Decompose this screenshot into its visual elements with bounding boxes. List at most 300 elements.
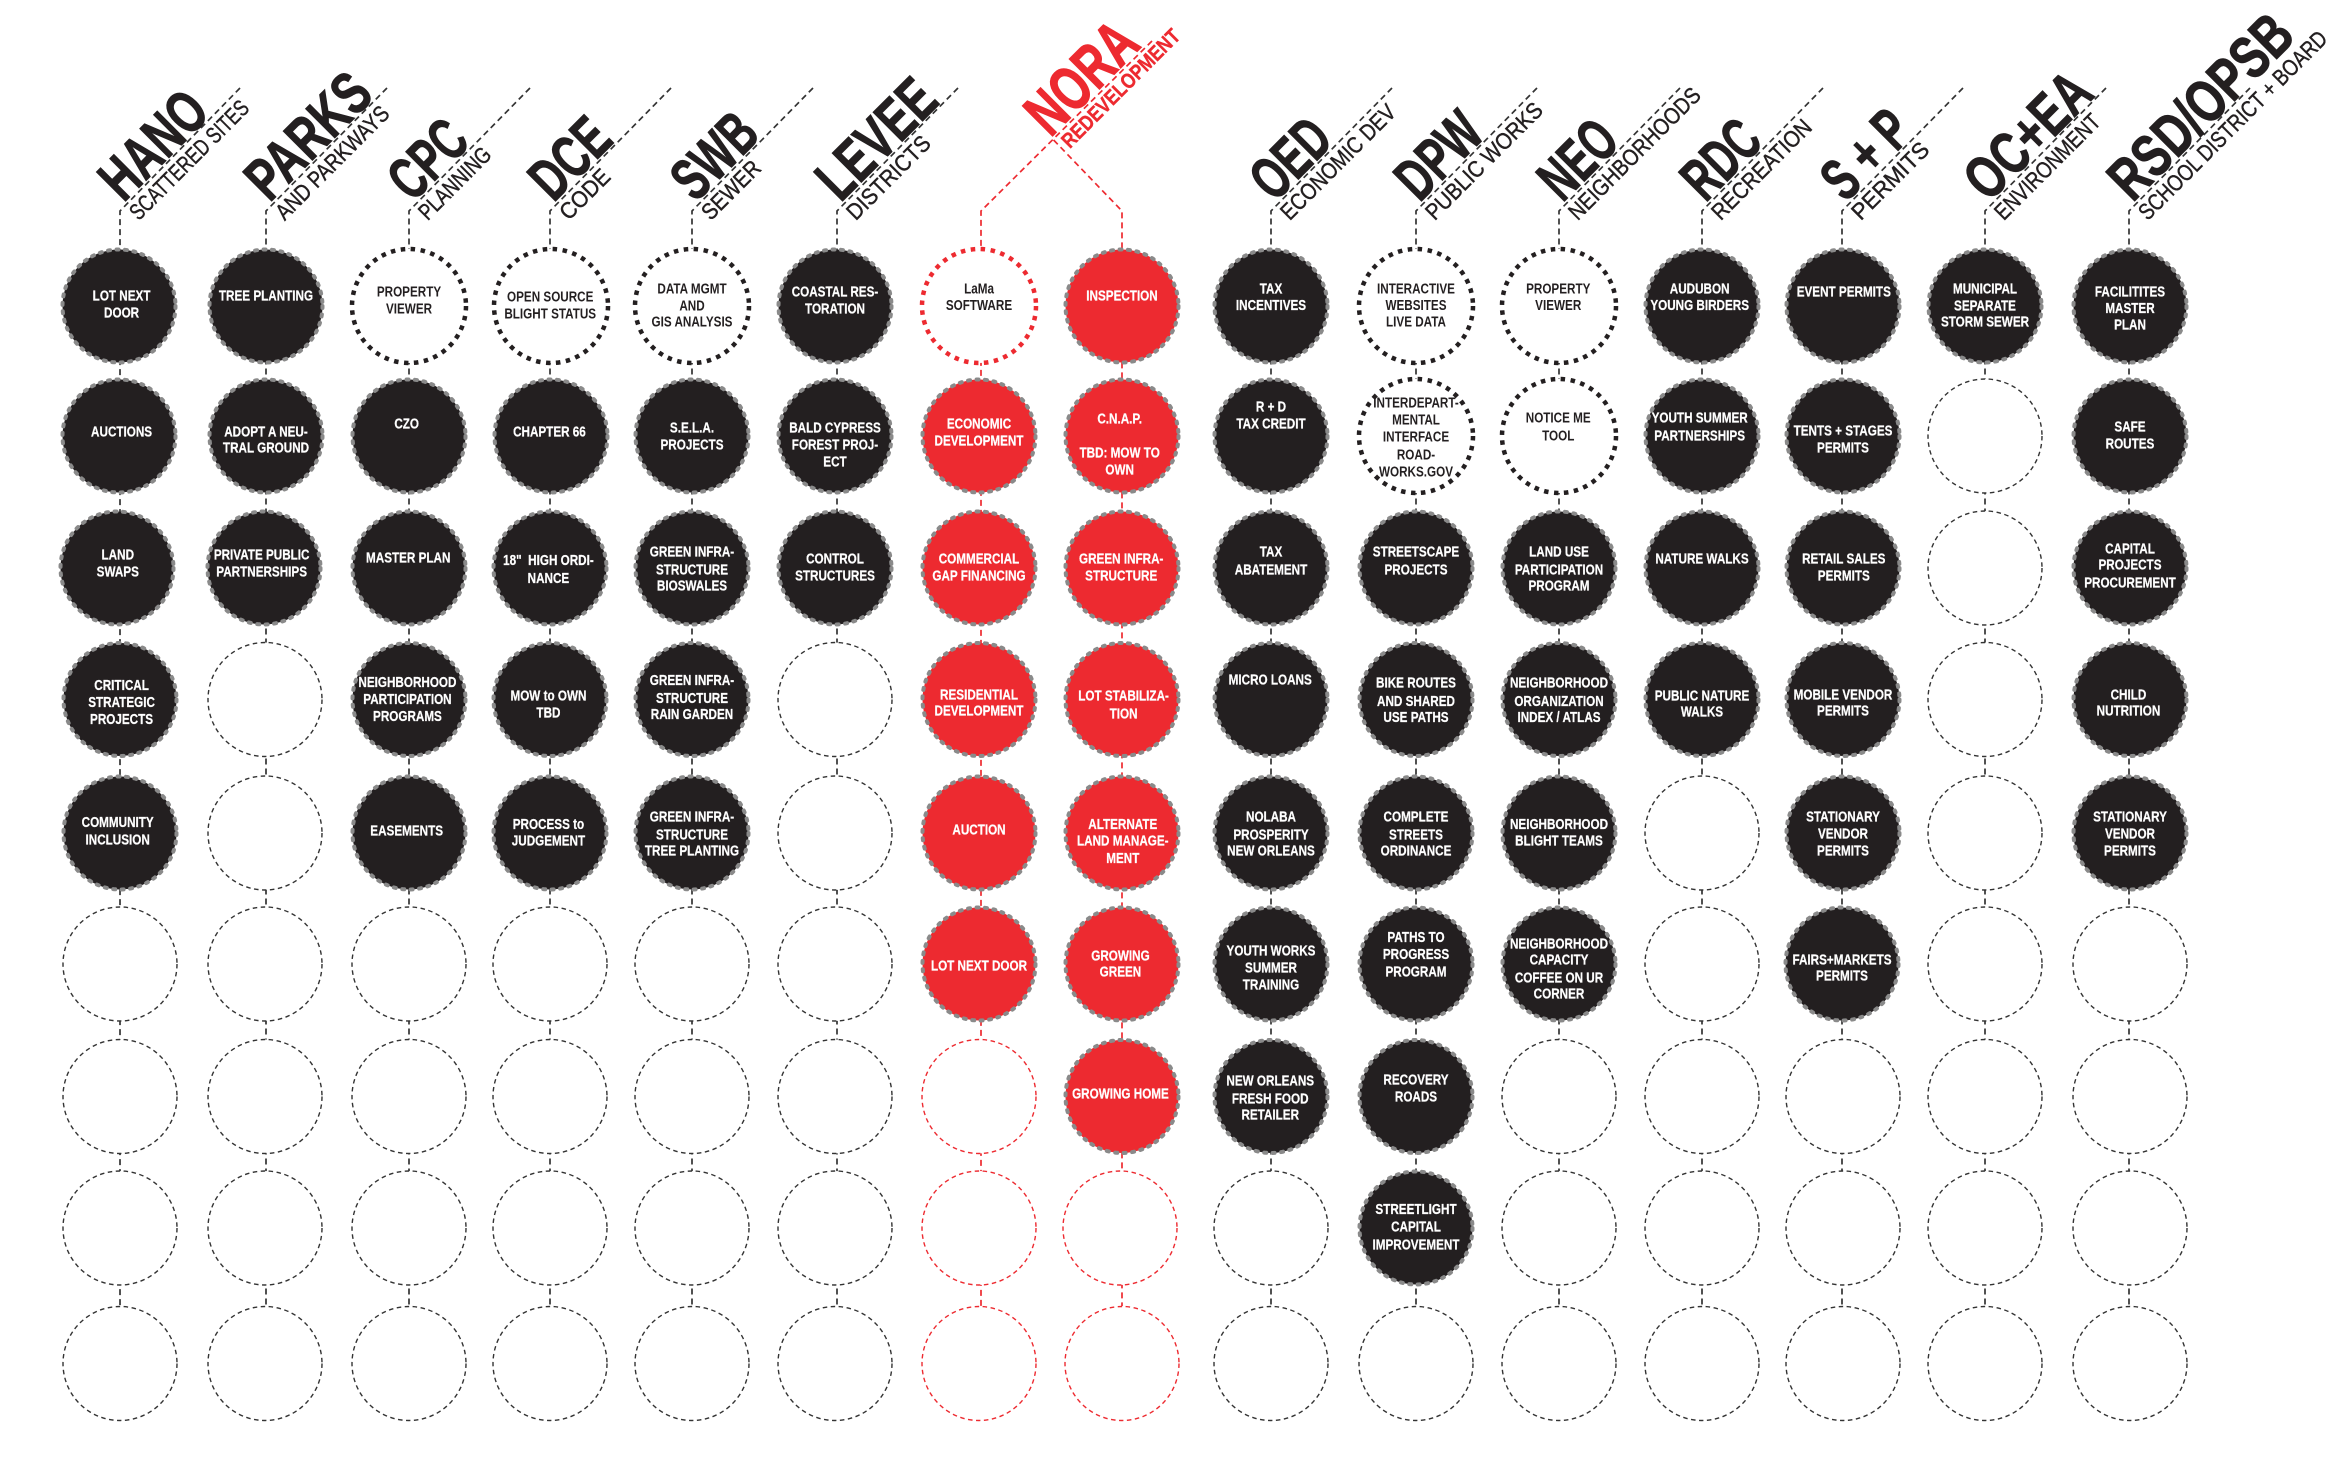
connector line <box>266 88 387 1306</box>
circle: easements: EASEMENTS <box>370 822 443 839</box>
circle: property viewer: VIEWER <box>386 300 432 317</box>
circle: neighborhood blight teams <box>1502 776 1616 890</box>
column: OED <box>1214 59 1401 1420</box>
circle: facilitites master plan: PLAN <box>2114 316 2146 333</box>
circle: event permits <box>1786 250 1900 362</box>
circle: growing green: GREEN <box>1100 963 1141 980</box>
circle: MOW to own TBD: MOW to OWN <box>510 687 586 704</box>
connector line <box>409 88 530 1306</box>
circle: property viewer <box>352 249 466 363</box>
heading: NEO neighborhoods <box>1523 42 1706 225</box>
circle: LaMa software <box>922 249 1036 363</box>
circle: facilitites master plan: MASTER <box>2105 300 2155 316</box>
circle: youth summer partnerships: PARTNERSHIPS <box>1654 427 1745 444</box>
heading: NEO neighborhoods: NEO <box>1524 106 1631 212</box>
circle: property viewer: PROPERTY <box>1526 280 1590 297</box>
circle: tax abatement: ABATEMENT <box>1235 561 1308 578</box>
circle: R + D tax credit <box>1214 380 1328 492</box>
circle: alternate land management: ALTERNATE <box>1088 816 1157 832</box>
heading: DCE code <box>514 104 635 225</box>
circle: streetlight capital improvement: STREETLIGHT <box>1375 1201 1457 1217</box>
empty circles <box>63 907 177 1420</box>
circle: interdepartmental interface roadworks.gov: MENTAL <box>1392 411 1440 428</box>
circle: bald cypress forest project: BALD CYPRESS <box>789 419 881 436</box>
circle: process to judgement: JUDGEMENT <box>512 832 586 849</box>
circle: neighborhood participation programs: PROGRAMS <box>373 708 442 724</box>
circle: bald cypress forest project: FOREST PROJ- <box>792 436 878 453</box>
circle: critical strategic projects <box>64 643 176 756</box>
circle: Audubon young birders: AUDUBON <box>1670 280 1730 297</box>
circle: youth summer partnerships: YOUTH SUMMER <box>1652 409 1748 426</box>
circle: critical strategic projects: PROJECTS <box>90 711 153 727</box>
circle: green infrastructure bioswales <box>636 512 748 624</box>
circle: green infrastructure bioswales: BIOSWALES <box>657 577 727 594</box>
heading: OC+EA environment <box>1949 58 2116 225</box>
circle: inspection <box>1066 250 1178 362</box>
circle: neighborhood participation programs: NEIGHBORHOOD <box>358 674 457 690</box>
circle: land swaps: SWAPS <box>97 563 139 580</box>
circle: green infrastructure tree planting: STRUCTURE <box>656 826 728 843</box>
circle: complete streets ordinance: COMPLETE <box>1384 808 1448 825</box>
circle: growing green: GROWING <box>1091 947 1150 964</box>
circle: fairs + markets permits: FAIRS+MARKETS <box>1792 951 1892 968</box>
circle: lot next door: LOT NEXT DOOR <box>931 957 1027 974</box>
column group: NORA <box>922 0 1185 1421</box>
circle: mobile vendor permits <box>1786 643 1900 756</box>
circle: process to judgement: PROCESS to <box>513 816 584 832</box>
circle: fairs + markets permits <box>1786 908 1898 1020</box>
circle: private public partnerships: PARTNERSHIPS <box>216 563 307 580</box>
circle: neighborhood organization index / atlas: NEIGHBORHOOD <box>1510 674 1608 691</box>
circle: neighborhood capacity coffee on ur corner: CORNER <box>1534 985 1585 1002</box>
circle: facilitites master plan <box>2074 250 2186 362</box>
circle: lot next door <box>922 908 1036 1020</box>
circle: New Orleans fresh food retailer <box>1214 1040 1328 1153</box>
circle: interactive websites live data: INTERACTIVE <box>1377 280 1455 297</box>
circle: green infrastructure tree planting: TREE PLANTING <box>645 842 739 859</box>
circle: tax abatement: TAX <box>1260 543 1282 560</box>
heading: DPW public works: PUBLIC WORKS <box>1420 97 1548 225</box>
circle: data mgmt and GIS analysis: GIS ANALYSIS <box>652 313 733 330</box>
circle: neighborhood capacity coffee on ur corner: NEIGHBORHOOD <box>1510 935 1608 952</box>
empty circles <box>778 642 892 1420</box>
circle: green infrastructure: GREEN INFRA- <box>1079 550 1163 567</box>
circle: child nutrition: NUTRITION <box>2097 702 2160 719</box>
empty circles <box>493 907 607 1420</box>
circle: tents + stages permits: PERMITS <box>1817 439 1869 456</box>
connector line <box>1702 88 1823 1306</box>
circle: control structures: CONTROL <box>806 550 864 567</box>
connector line <box>1559 88 1680 1306</box>
circle: master plan: MASTER PLAN <box>366 549 450 566</box>
circle: bald cypress forest project: ECT <box>823 453 847 470</box>
circle: capital projects procurement: PROJECTS <box>2098 556 2162 573</box>
empty circles <box>1786 1040 1900 1420</box>
connector line <box>692 88 813 1306</box>
circle: open source blight status: BLIGHT STATUS <box>504 305 596 322</box>
circle: neighborhood blight teams: BLIGHT TEAMS <box>1515 832 1603 849</box>
circle: municipal separate storm sewer: STORM SEWER <box>1941 313 2029 330</box>
circle: control structures: STRUCTURES <box>795 567 875 584</box>
circle: nature walks: NATURE WALKS <box>1655 550 1749 567</box>
circle: complete streets ordinance: ORDINANCE <box>1381 842 1451 859</box>
circle: public nature walks <box>1646 643 1758 756</box>
circle: lot stabilization: LOT STABILIZA- <box>1078 687 1169 704</box>
connector line <box>1985 88 2106 1306</box>
circle: interdepartmental interface roadworks.gov: ROAD- <box>1397 446 1435 463</box>
circle: youth works summer training: SUMMER <box>1245 959 1297 976</box>
circle: public nature walks: WALKS <box>1681 703 1723 720</box>
heading: HANO scattered sites: SCATTERED SITES <box>124 95 254 225</box>
circle: recovery roads <box>1360 1040 1472 1153</box>
circle: tree planting <box>210 250 322 362</box>
circle: capital projects procurement: CAPITAL <box>2105 540 2155 557</box>
empty red circles <box>1063 1171 1179 1420</box>
column: NEO <box>1502 42 1706 1421</box>
circle: green infrastructure rain garden: GREEN INFRA- <box>650 672 734 688</box>
heading: DCE code: DCE <box>515 104 624 212</box>
circle: capital projects procurement <box>2074 512 2186 624</box>
circle: C.N.A.P.: C.N.A.P. <box>1097 410 1142 427</box>
circle: open source blight status <box>494 249 608 363</box>
circle: coastal restoration: TORATION <box>805 300 865 317</box>
circle: municipal separate storm sewer: SEPARATE <box>1954 297 2016 314</box>
circle: New Orleans fresh food retailer: FRESH FOOD <box>1232 1090 1309 1107</box>
column: SWB <box>635 88 813 1420</box>
heading: OC+EA environment: ENVIRONMENT <box>1989 108 2106 225</box>
circle: inspection: INSPECTION <box>1086 287 1158 304</box>
circle: bald cypress forest project <box>778 380 892 492</box>
circle: private public partnerships <box>208 512 320 624</box>
circle: lot stabilization: TION <box>1110 705 1138 722</box>
empty circles <box>1502 1040 1616 1420</box>
circle: neighborhood capacity coffee on ur corner <box>1502 908 1616 1020</box>
circle: paths to progress program: PROGRAM <box>1385 963 1447 980</box>
heading: SWB sewer: SEWER <box>696 155 766 225</box>
circle: neighborhood blight teams: NEIGHBORHOOD <box>1510 816 1608 832</box>
circle: streetlight capital improvement <box>1360 1172 1472 1284</box>
circle: tax incentives: TAX <box>1260 280 1282 297</box>
circle: lot next door: LOT NEXT <box>93 287 151 304</box>
circle: bike routes and shared use paths: AND SHARED <box>1377 693 1455 709</box>
circle: mobile vendor permits: MOBILE VENDOR <box>1794 686 1893 703</box>
circle: streetlight capital improvement: CAPITAL <box>1391 1218 1441 1235</box>
circle: neighborhood organization index / atlas: ORGANIZATION <box>1514 693 1604 709</box>
column: DCE <box>493 88 671 1420</box>
circle: youth works summer training <box>1214 908 1328 1020</box>
circle: critical strategic projects: CRITICAL <box>94 677 149 693</box>
circle: chapter 66 <box>494 380 608 492</box>
circle: neighborhood participation programs <box>352 643 466 756</box>
circle: neighborhood organization index / atlas: INDEX / ATLAS <box>1517 709 1601 725</box>
connector line <box>1842 88 1963 1306</box>
circle: 18 inch high ordinance: NANCE <box>528 570 569 586</box>
circle: MOW to own TBD: TBD <box>536 704 561 721</box>
column: HANO <box>60 55 254 1421</box>
circle: tax incentives <box>1214 250 1328 362</box>
circle: complete streets ordinance <box>1360 776 1472 890</box>
heading: S + P permits: PERMITS <box>1846 136 1934 225</box>
circle: paths to progress program: PROGRESS <box>1383 946 1449 962</box>
circle: CZO <box>352 380 466 492</box>
circle: coastal restoration <box>778 250 892 362</box>
circle: nature walks <box>1646 512 1758 624</box>
circle: recovery roads: RECOVERY <box>1383 1071 1449 1088</box>
circle: community inclusion: COMMUNITY <box>82 814 154 830</box>
circle: green infrastructure bioswales: STRUCTURE <box>656 561 728 578</box>
circle: streetscape projects: STREETSCAPE <box>1373 543 1459 560</box>
circle: neighborhood organization index / atlas <box>1502 643 1616 756</box>
circle: C.N.A.P.: TBD: MOW TO <box>1080 444 1160 461</box>
circle: Audubon young birders <box>1646 250 1758 362</box>
circle: green infrastructure bioswales: GREEN INFRA- <box>650 543 734 560</box>
empty red circles <box>922 1040 1036 1420</box>
heading: CPC planning: PLANNING <box>413 141 496 225</box>
circle: stationary vendor permits: STATIONARY <box>2093 808 2167 825</box>
circle: MOW to own TBD <box>494 643 606 756</box>
circle: adopt a neutral ground: ADOPT A NEU- <box>224 423 308 440</box>
circle: youth works summer training: YOUTH WORKS <box>1227 942 1316 959</box>
circle: municipal separate storm sewer: MUNICIPAL <box>1953 280 2017 297</box>
circle: neighborhood capacity coffee on ur corner: COFFEE ON UR <box>1515 969 1603 986</box>
circle: interdepartmental interface roadworks.gov: INTERFACE <box>1383 428 1449 445</box>
empty circles <box>1928 379 2042 1420</box>
circle: growing home: GROWING HOME <box>1072 1085 1169 1102</box>
circle: bike routes and shared use paths: USE PATHS <box>1383 709 1449 725</box>
circle: green infrastructure: STRUCTURE <box>1085 567 1157 584</box>
connector line <box>550 88 671 1306</box>
circle: C.N.A.P. <box>1066 380 1178 492</box>
circle: economic development: DEVELOPMENT <box>935 432 1024 449</box>
circle: neighborhood participation programs: PARTICIPATION <box>363 691 452 707</box>
circle: interactive websites live data: WEBSITES <box>1385 297 1447 313</box>
empty circles <box>1214 1171 1328 1420</box>
connector line <box>2129 88 2250 1306</box>
circle: stationary vendor permits: PERMITS <box>1817 842 1869 859</box>
heading: HANO scattered sites: HANO <box>85 77 221 212</box>
circle: commercial gap financing <box>922 512 1036 624</box>
connector line <box>1416 88 1537 1306</box>
circle: public nature walks: PUBLIC NATURE <box>1655 687 1749 704</box>
circle: safe routes: ROUTES <box>2106 435 2154 452</box>
circle: notice me tool <box>1502 379 1616 493</box>
circle: interdepartmental interface roadworks.gov: INTERDEPART- <box>1373 394 1459 411</box>
circle: bike routes and shared use paths: BIKE ROUTES <box>1376 674 1456 691</box>
circle: stationary vendor permits <box>2074 776 2186 890</box>
heading: OED economic dev: OED <box>1236 104 1345 212</box>
empty circles <box>352 907 466 1420</box>
circle: paths to progress program <box>1360 908 1472 1020</box>
circle: retail sales permits: PERMITS <box>1818 567 1870 584</box>
circle: CZO: CZO <box>394 415 419 432</box>
circle: green infrastructure rain garden: RAIN GARDEN <box>651 706 733 722</box>
circle: green infrastructure tree planting: GREEN INFRA- <box>650 808 734 825</box>
circle: safe routes: SAFE <box>2114 418 2146 435</box>
heading: NEO neighborhoods: NEIGHBORHOODS <box>1563 82 1706 225</box>
circle: event permits: EVENT PERMITS <box>1797 283 1891 300</box>
circle: control structures <box>778 512 892 624</box>
circle: C.N.A.P.: OWN <box>1105 461 1134 478</box>
circle: green infrastructure rain garden: STRUCTURE <box>656 690 728 706</box>
circle: alternate land management: LAND MANAGE- <box>1077 832 1169 849</box>
empty circles <box>1645 776 1759 1420</box>
circle: retail sales permits <box>1786 512 1900 624</box>
circle: interdepartmental interface roadworks.gov: WORKS.GOV <box>1379 463 1453 480</box>
circle: S.E.L.A. projects: PROJECTS <box>660 436 724 453</box>
circle: alternate land management: MENT <box>1106 850 1140 866</box>
circle: capital projects procurement: PROCUREMENT <box>2084 574 2176 591</box>
circle: micro loans: MICRO LOANS <box>1229 671 1312 688</box>
circle: lot next door <box>62 250 176 362</box>
circle: green infrastructure rain garden <box>636 643 748 756</box>
circle: streetscape projects: PROJECTS <box>1384 561 1448 578</box>
circle: property viewer <box>1502 249 1616 363</box>
circle: youth summer partnerships <box>1646 380 1758 492</box>
heading: SWB sewer: SWB <box>657 99 771 212</box>
heading: DCE code: CODE <box>554 163 615 225</box>
circle: property viewer: VIEWER <box>1535 297 1582 313</box>
heading: LEVEE districts: DISTRICTS <box>841 130 936 225</box>
circle: open source blight status: OPEN SOURCE <box>507 288 593 305</box>
circle: New Orleans fresh food retailer: NEW ORLEANS <box>1226 1072 1314 1089</box>
heading: SWB sewer <box>656 99 782 225</box>
circle: notice me tool: TOOL <box>1542 427 1574 444</box>
circle: S.E.L.A. projects <box>636 380 748 492</box>
circle: Audubon young birders: YOUNG BIRDERS <box>1650 297 1749 313</box>
circle: chapter 66: CHAPTER 66 <box>513 423 586 440</box>
circle: neighborhood capacity coffee on ur corner: CAPACITY <box>1530 951 1588 968</box>
circle: NOLABA prosperity New Orleans: NOLABA <box>1246 808 1296 825</box>
empty circles <box>635 907 749 1420</box>
connector line <box>837 88 958 1306</box>
column: RDC <box>1645 74 1823 1420</box>
circle: property viewer: PROPERTY <box>377 283 441 300</box>
circle: micro loans <box>1214 643 1328 756</box>
circle: green infrastructure tree planting <box>636 776 748 890</box>
circle: master plan <box>352 512 466 624</box>
circle: adopt a neutral ground <box>210 380 322 492</box>
heading: PARKS and parkways <box>230 59 396 225</box>
circle: streetlight capital improvement: IMPROVEMENT <box>1372 1236 1460 1253</box>
circle: stationary vendor permits: PERMITS <box>2104 842 2156 859</box>
circle: economic development <box>922 380 1036 492</box>
empty circles <box>208 642 322 1420</box>
circle: paths to progress program: PATHS TO <box>1387 929 1445 945</box>
circle: tree planting: TREE PLANTING <box>219 287 313 304</box>
heading: NORA redevelopment: REDEVELOPMENT <box>1057 25 1185 153</box>
circle: growing home <box>1066 1040 1178 1153</box>
circle: interdepartmental interface roadworks.gov <box>1359 379 1473 493</box>
column: RSD/OPSB <box>2073 0 2332 1420</box>
circle: facilitites master plan: FACILITITES <box>2095 283 2165 300</box>
connector line <box>120 88 240 1306</box>
circle: retail sales permits: RETAIL SALES <box>1802 550 1885 567</box>
circle: safe routes <box>2074 380 2186 492</box>
heading: CPC planning <box>373 101 496 225</box>
column: PARKS <box>208 59 396 1420</box>
circle: NOLABA prosperity New Orleans <box>1214 776 1328 890</box>
circle: stationary vendor permits <box>1786 776 1900 890</box>
circle: mobile vendor permits: PERMITS <box>1817 702 1869 719</box>
heading: DPW public works: DPW <box>1381 98 1496 212</box>
heading: PARKS and parkways: AND PARKWAYS <box>270 100 394 225</box>
circle: lot stabilization <box>1066 643 1178 756</box>
heading: RDC recreation: RDC <box>1667 106 1774 212</box>
circle: critical strategic projects: STRATEGIC <box>88 694 155 710</box>
heading: S + P permits <box>1806 96 1935 225</box>
circle: community inclusion: INCLUSION <box>86 831 150 848</box>
heading: OED economic dev: ECONOMIC DEV <box>1275 99 1401 225</box>
circle: residential development: RESIDENTIAL <box>940 686 1018 703</box>
circle: data mgmt and GIS analysis <box>635 249 749 363</box>
circle: child nutrition <box>2074 643 2186 756</box>
circle: R + D tax credit: R + D <box>1256 398 1286 415</box>
circle: R + D tax credit: TAX CREDIT <box>1236 415 1306 432</box>
circle: child nutrition: CHILD <box>2111 686 2147 703</box>
circle: process to judgement <box>494 776 606 890</box>
heading: LEVEE districts: LEVEE <box>802 65 950 212</box>
column: DPW <box>1359 57 1548 1421</box>
circle: youth works summer training: TRAINING <box>1243 976 1299 993</box>
circle: auctions: AUCTIONS <box>91 423 152 440</box>
circle: private public partnerships: PRIVATE PUBLIC <box>214 546 310 563</box>
column: LEVEE <box>778 65 961 1420</box>
circle: stationary vendor permits: VENDOR <box>2105 825 2155 842</box>
circle: auction <box>922 776 1036 890</box>
circle: tax incentives: INCENTIVES <box>1236 297 1306 313</box>
heading: S + P permits: S + P <box>1807 96 1924 212</box>
circle: adopt a neutral ground: TRAL GROUND <box>223 439 309 456</box>
circle: green infrastructure <box>1066 512 1178 624</box>
circle: growing green <box>1066 908 1178 1020</box>
circle: NOLABA prosperity New Orleans: PROSPERITY <box>1233 826 1309 843</box>
column: S + P <box>1786 88 1963 1420</box>
circle: economic development: ECONOMIC <box>947 415 1011 432</box>
circle: 18 inch high ordinance: 18" HIGH ORDI- <box>503 552 594 568</box>
circle: auctions <box>62 380 176 492</box>
circle: auction: AUCTION <box>952 821 1006 838</box>
circle: land use participation program: PARTICIPATION <box>1515 561 1603 578</box>
circle: streetscape projects <box>1360 512 1472 624</box>
circle: 18 inch high ordinance <box>494 512 606 624</box>
empty circles <box>1359 1306 1473 1420</box>
circle: LaMa software: SOFTWARE <box>946 297 1012 313</box>
circle: land use participation program <box>1502 512 1616 624</box>
circle: easements <box>352 776 466 890</box>
circle: interactive websites live data <box>1359 249 1473 363</box>
circle: land use participation program: LAND USE <box>1529 543 1589 560</box>
circle: data mgmt and GIS analysis: AND <box>679 297 705 314</box>
circle: stationary vendor permits: STATIONARY <box>1806 808 1880 825</box>
circle: complete streets ordinance: STREETS <box>1389 826 1443 843</box>
circle: municipal separate storm sewer <box>1928 250 2042 362</box>
circle: commercial gap financing: COMMERCIAL <box>939 550 1019 567</box>
heading: OC+EA environment: OC+EA <box>1950 58 2105 212</box>
circle: interactive websites live data: LIVE DATA <box>1386 313 1446 330</box>
circle: community inclusion <box>64 776 176 890</box>
circle: residential development: DEVELOPMENT <box>935 702 1024 719</box>
circle: land swaps <box>60 512 174 624</box>
connector line <box>1271 88 1392 1306</box>
circle: LaMa software: LaMa <box>964 280 994 297</box>
circle: tents + stages permits: TENTS + STAGES <box>1794 422 1892 439</box>
circle: NOLABA prosperity New Orleans: NEW ORLEANS <box>1227 842 1315 859</box>
circle: coastal restoration: COASTAL RES- <box>792 283 878 300</box>
circle: New Orleans fresh food retailer: RETAILER <box>1241 1106 1299 1123</box>
circle: bike routes and shared use paths <box>1360 643 1472 756</box>
connector lines <box>981 41 1152 1306</box>
column: OC+EA <box>1928 58 2116 1420</box>
